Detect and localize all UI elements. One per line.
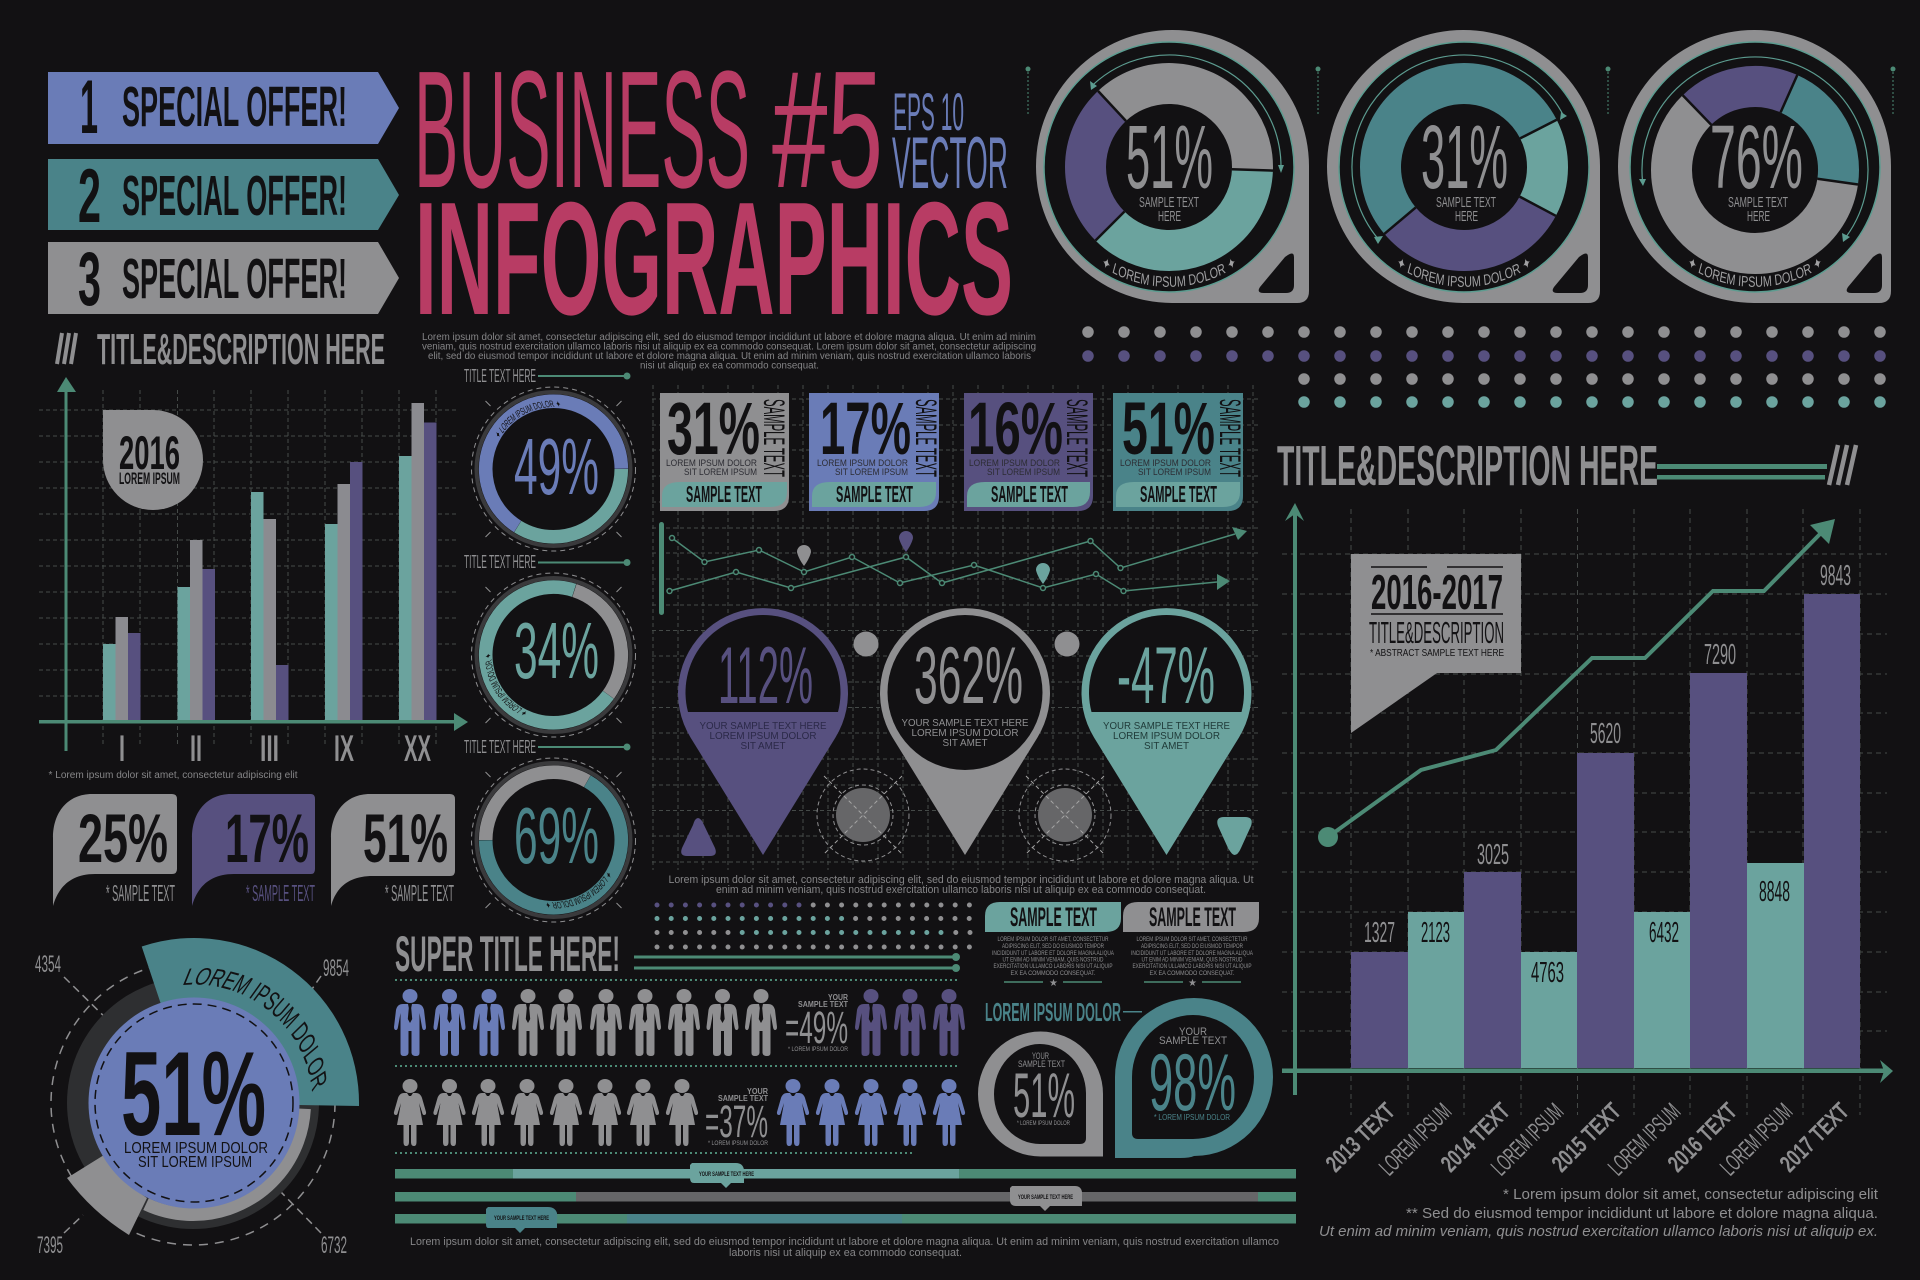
- sample text card 1: ADIPISCING ELIT, SED DO EIUSMOD TEMPOR: [1002, 944, 1105, 950]
- line chart markers: [797, 531, 1050, 584]
- main chart axis labels: 2013 TEXT: [1321, 1098, 1401, 1178]
- big donut: SIT LOREM IPSUM: [138, 1154, 252, 1171]
- people stat 49%: SAMPLE TEXT: [798, 1000, 848, 1009]
- donut value labels: 4354: [35, 951, 61, 978]
- people stat 49%: * LOREM IPSUM DOLOR: [788, 1047, 849, 1053]
- progress bar 1: YOUR SAMPLE TEXT HERE: [699, 1172, 754, 1178]
- progress bar 3: [395, 1207, 1296, 1233]
- banner 1: [48, 65, 399, 150]
- title tag 1: TITLE TEXT HERE: [464, 366, 536, 386]
- bottom caption: laboris nisi ut aliquip ex ea commodo consequat.: [729, 1247, 962, 1259]
- ring 49%: ✦ LOREM IPSUM DOLOR ✦: [496, 400, 560, 437]
- sample text card 2: LOREM IPSUM DOLOR SIT AMET, CONSECTETUR: [1136, 937, 1248, 943]
- banner 1: 1: [80, 65, 98, 150]
- bar chart axes: [39, 377, 468, 751]
- stat card 31%: SIT LOREM IPSUM: [684, 467, 757, 478]
- gauge 76%: SAMPLE TEXT: [1728, 194, 1788, 211]
- title tag 3: TITLE TEXT HERE: [464, 737, 536, 757]
- ring 49%: [471, 386, 636, 552]
- pins caption: [668, 874, 1254, 896]
- stat card 16%: 16%: [968, 387, 1063, 470]
- stat card 51%: SIT LOREM IPSUM: [1138, 467, 1211, 478]
- pin 112%: YOUR SAMPLE TEXT HERE: [700, 720, 826, 732]
- main title: BUSINESS: [414, 37, 750, 223]
- chart footnotes: [1319, 1186, 1879, 1240]
- main chart values: [1364, 560, 1851, 989]
- stat card 51%: 51%: [1122, 387, 1215, 470]
- bar chart category labels: I: [119, 728, 125, 769]
- stat card 17%: SAMPLE TEXT: [909, 399, 942, 477]
- bottom caption: Lorem ipsum dolor sit amet, consectetur adipiscing elit, sed do eiusmod tempor incididunt ut labore et dolore magna aliqua. Ut enim ad minim veniam, quis nostrud exercitation ullamco: [410, 1236, 1279, 1248]
- main chart bars: [1351, 594, 1860, 1068]
- stat card 17%: SIT LOREM IPSUM: [835, 467, 908, 478]
- gauge 76%: 76%: [1710, 108, 1803, 208]
- pin 362%: YOUR SAMPLE TEXT HERE: [902, 717, 1028, 729]
- ring 34%: ✦ LOREM IPSUM DOLOR ✦: [486, 654, 526, 716]
- intro paragraph: elit, sed do eiusmod tempor incididunt ut labore et dolore magna aliqua. Ut enim ad minim veniam, quis nostrud exercitation ullamco laboris: [428, 351, 1031, 362]
- callout 25%: 25%: [78, 800, 168, 877]
- callout 17%: [192, 794, 315, 906]
- sample text card 2: EXERCITATION ULLAMCO LABORIS NISI UT ALIQUIP: [1132, 964, 1252, 970]
- pin 362%: [880, 608, 1050, 855]
- people stat 49%: [785, 993, 849, 1053]
- main title: [414, 37, 1013, 349]
- ring 49%: 49%: [514, 422, 599, 511]
- sample text card 2: ★: [1188, 978, 1197, 989]
- infographic canvas: INFOGRAPHICS: [415, 169, 1013, 349]
- pin 112%: 112%: [718, 631, 813, 721]
- sample text card 1: UT ENIM AD MINIM VENIAM, QUIS NOSTRUD: [1002, 958, 1104, 964]
- gauge 51%: 51%: [1126, 108, 1213, 208]
- bar chart category labels: III: [260, 728, 279, 769]
- gauge 76%: HERE: [1747, 208, 1770, 225]
- pin -47%: -47%: [1117, 631, 1215, 721]
- main chart axes: [1282, 503, 1893, 1095]
- callout 51%: 51%: [363, 800, 448, 877]
- small markers beside gauges: [1026, 66, 1896, 116]
- main chart values: 4763: [1531, 957, 1564, 989]
- ring 34%: 34%: [514, 606, 599, 695]
- main chart axis labels: LOREM IPSUM: [1603, 1098, 1686, 1181]
- callout 17%: 17%: [225, 800, 309, 877]
- people stat 37%: * LOREM IPSUM DOLOR: [708, 1141, 769, 1147]
- gauge 51%: ✦ LOREM IPSUM DOLOR ✦: [1103, 258, 1235, 287]
- 2016 teardrop badge: [103, 410, 203, 510]
- teal teardrop 98%: * LOREM IPSUM DOLOR: [1154, 1113, 1230, 1122]
- dotted dividers: [395, 980, 960, 1153]
- stat card 16%: SIT LOREM IPSUM: [987, 467, 1060, 478]
- gauge 31%: 31%: [1421, 108, 1508, 208]
- gauge 51%: [1036, 30, 1309, 303]
- ring 69%: [471, 758, 636, 922]
- stat card 31%: 31%: [667, 387, 760, 470]
- stat card 16%: SAMPLE TEXT: [991, 481, 1068, 507]
- bar chart bars: [103, 403, 436, 720]
- ring 34%: [471, 572, 636, 738]
- stat card 17%: SAMPLE TEXT: [836, 481, 913, 507]
- stat card 31%: SAMPLE TEXT: [686, 481, 762, 507]
- ring 69%: ✦ LOREM IPSUM DOLOR ✦: [546, 872, 611, 908]
- pin -47%: LOREM IPSUM DOLOR: [1113, 730, 1220, 742]
- banner 3: SPECIAL OFFER!: [122, 247, 347, 311]
- crosshair circle 1: [817, 769, 909, 861]
- sample text card 2: SAMPLE TEXT: [1149, 902, 1236, 932]
- callout 2016-2017: * ABSTRACT SAMPLE TEXT HERE: [1370, 648, 1504, 659]
- main title: #5: [772, 37, 883, 223]
- section heading left: [57, 325, 385, 374]
- small circles between pins: [854, 632, 1080, 656]
- callout 2016-2017: [1351, 554, 1521, 733]
- callout 25%: [53, 794, 177, 906]
- gray teardrop 51%: SAMPLE TEXT: [1018, 1059, 1065, 1069]
- small triangle down: [1217, 817, 1252, 855]
- donut value labels: [35, 951, 349, 1259]
- infographic canvas: * SAMPLE TEXT: [106, 880, 175, 906]
- main chart values: 2123: [1421, 917, 1450, 949]
- trend line arrow: [1318, 519, 1835, 847]
- pin 112%: [678, 608, 848, 855]
- super title rules: [634, 953, 960, 972]
- pins caption: enim ad minim veniam, quis nostrud exercitation ullamco laboris nisi ut aliquip ex ea commodo consequat.: [716, 884, 1206, 896]
- main chart axis labels: LOREM IPSUM: [1715, 1098, 1798, 1181]
- sample text card 2: ADIPISCING ELIT, SED DO EIUSMOD TEMPOR: [1141, 944, 1244, 950]
- gauge 51%: SAMPLE TEXT: [1139, 194, 1199, 211]
- gauge 76%: ✦ LOREM IPSUM DOLOR ✦: [1689, 258, 1821, 287]
- main chart grid: [1282, 509, 1887, 1115]
- sample text card 1: SAMPLE TEXT: [1010, 902, 1097, 932]
- banner 2: [48, 154, 399, 239]
- chart footnotes: ** Sed do eiusmod tempor incididunt ut labore et dolore magna aliqua.: [1406, 1205, 1878, 1222]
- pin 362%: LOREM IPSUM DOLOR: [912, 727, 1019, 739]
- main chart values: 6432: [1649, 917, 1679, 949]
- bottom caption: [410, 1236, 1279, 1259]
- infographic canvas: TITLE&DESCRIPTION: [1369, 615, 1504, 650]
- banner 2: SPECIAL OFFER!: [122, 164, 347, 228]
- teal teardrop 98%: SAMPLE TEXT: [1159, 1035, 1227, 1047]
- infographic canvas: 9854: [323, 955, 349, 982]
- people stat 37%: SAMPLE TEXT: [718, 1094, 768, 1103]
- sample text card 1: ★: [1049, 978, 1058, 989]
- main chart axis labels: 2016 TEXT: [1663, 1098, 1743, 1178]
- progress bar 3: YOUR SAMPLE TEXT HERE: [494, 1216, 549, 1222]
- gray teardrop 51%: 51%: [1013, 1061, 1075, 1131]
- sample text card 1: EXERCITATION ULLAMCO LABORIS NISI UT ALIQUIP: [994, 964, 1112, 970]
- large dot matrix: [1088, 332, 1881, 402]
- teal teardrop 98%: YOUR: [1179, 1026, 1207, 1038]
- central grid: [652, 385, 1258, 870]
- chart footnotes: * Lorem ipsum dolor sit amet, consectetur adipiscing elit: [1503, 1186, 1879, 1203]
- main chart axis labels: 2015 TEXT: [1547, 1098, 1627, 1178]
- gauge 76%: [1618, 30, 1891, 303]
- stat card 16%: SAMPLE TEXT: [1060, 399, 1093, 477]
- infographic canvas: * SAMPLE TEXT: [246, 880, 315, 906]
- main chart axis labels: 2014 TEXT: [1436, 1098, 1516, 1178]
- stat card 51%: SAMPLE TEXT: [1213, 399, 1246, 477]
- small dot rows: [657, 905, 971, 947]
- main chart axis labels: 2017 TEXT: [1775, 1098, 1855, 1178]
- people stat 49%: =49%: [785, 1002, 848, 1053]
- banner 3: [48, 237, 399, 322]
- bar chart category labels: XX: [404, 728, 431, 769]
- bar chart footnote: * Lorem ipsum dolor sit amet, consectetur adipiscing elit: [48, 770, 298, 781]
- big donut: LOREM IPSUM DOLOR: [183, 968, 326, 1092]
- 2016 teardrop badge: 2016: [119, 426, 180, 479]
- gauge 31%: ✦ LOREM IPSUM DOLOR ✦: [1398, 258, 1530, 287]
- bar chart category labels: IX: [334, 728, 354, 769]
- teal teardrop 98%: [1115, 998, 1273, 1158]
- people row men: [394, 989, 965, 1056]
- stat card 17%: 17%: [820, 387, 911, 470]
- callout 2016-2017: 2016-2017: [1371, 566, 1503, 620]
- sample text card 2: UT ENIM AD MINIM VENIAM, QUIS NOSTRUD: [1142, 958, 1243, 964]
- chart footnotes: Ut enim ad minim veniam, quis nostrud exercitation ullamco laboris nisi ut aliquip ex.: [1319, 1223, 1878, 1240]
- big donut: LOREM IPSUM DOLOR: [124, 1140, 268, 1157]
- main chart values: 1327: [1364, 917, 1395, 949]
- gray teardrop 51%: * LOREM IPSUM DOLOR: [1017, 1121, 1071, 1127]
- line chart: [659, 522, 1247, 615]
- stat card 51%: SAMPLE TEXT: [1140, 481, 1217, 507]
- bar chart category labels: [119, 728, 431, 769]
- people stat 37%: =37%: [705, 1096, 768, 1147]
- gauge 31%: HERE: [1455, 208, 1478, 225]
- infographic canvas: * SAMPLE TEXT: [385, 880, 454, 906]
- main chart values: 5620: [1590, 718, 1621, 750]
- small triangle up: [681, 818, 716, 856]
- sample text card 1: [985, 902, 1121, 989]
- pin 362%: 362%: [914, 631, 1023, 721]
- sample text card 1: INCIDIDUNT UT LABORE ET DOLORE MAGNA ALIQUA: [992, 951, 1114, 957]
- main chart axis labels: LOREM IPSUM: [1374, 1098, 1457, 1181]
- main chart values: 7290: [1704, 639, 1736, 671]
- main chart values: 3025: [1477, 839, 1509, 871]
- progress bar 2: [395, 1186, 1296, 1211]
- banner 1: SPECIAL OFFER!: [122, 75, 347, 139]
- main chart axis labels: LOREM IPSUM: [1486, 1098, 1569, 1181]
- gray teardrop 51%: YOUR: [1032, 1051, 1049, 1061]
- lorem ipsum dolor heading: LOREM IPSUM DOLOR: [985, 997, 1121, 1027]
- intro paragraph: veniam, quis nostrud exercitation ullamco laboris nisi ut aliquip ex ea commodo consequat. Lorem ipsum dolor sit amet, consectetur adipiscing: [422, 342, 1036, 352]
- sample text card 2: [1123, 902, 1259, 989]
- main chart axis labels: [1321, 1098, 1855, 1181]
- 2016 teardrop badge: LOREM IPSUM: [119, 469, 180, 488]
- gray teardrop 51%: [978, 1032, 1103, 1156]
- donut value labels: 7395: [37, 1232, 63, 1259]
- bar chart category labels: II: [190, 728, 202, 769]
- pin -47%: YOUR SAMPLE TEXT HERE: [1103, 720, 1230, 732]
- donut value labels: 6732: [321, 1232, 347, 1259]
- people row women: [394, 1079, 965, 1146]
- gauge 31%: SAMPLE TEXT: [1436, 194, 1496, 211]
- pin 112%: SIT AMET: [740, 740, 786, 752]
- pin 112%: LOREM IPSUM DOLOR: [710, 730, 817, 742]
- stat card 17%: LOREM IPSUM DOLOR: [817, 458, 908, 469]
- stat card 31%: [660, 387, 790, 511]
- sample text card 1: LOREM IPSUM DOLOR SIT AMET, CONSECTETUR: [998, 937, 1109, 943]
- pin 362%: SIT AMET: [942, 737, 988, 749]
- intro paragraph: [422, 332, 1036, 372]
- infographic canvas: TITLE&DESCRIPTION HERE: [97, 325, 385, 374]
- big donut: [50, 938, 359, 1246]
- pins caption: Lorem ipsum dolor sit amet, consectetur adipiscing elit, sed do eiusmod tempor incididunt ut labore et dolore magna aliqua. Ut: [668, 874, 1254, 886]
- eps vector label: [892, 83, 1008, 204]
- progress bar 1: [395, 1163, 1296, 1188]
- crosshair circle 2: [1019, 769, 1111, 861]
- stat card 31%: LOREM IPSUM DOLOR: [666, 458, 757, 469]
- stat card 51%: [1113, 387, 1246, 511]
- sample text card 2: INCIDIDUNT UT LABORE ET DOLORE MAGNA ALIQUA: [1131, 951, 1253, 957]
- pin -47%: SIT AMET: [1144, 740, 1190, 752]
- people stat 37%: YOUR: [747, 1087, 768, 1096]
- sample text card 1: EX EA COMMODO CONSEQUAT.: [1010, 971, 1096, 977]
- intro paragraph: Lorem ipsum dolor sit amet, consectetur adipiscing elit, sed do eiusmod tempor incididunt ut labore et dolore magna aliqua. Ut enim ad minim: [422, 332, 1036, 343]
- banner 3: 3: [78, 237, 101, 322]
- teal teardrop 98%: 98%: [1149, 1038, 1236, 1128]
- eps vector label: EPS 10: [893, 83, 964, 142]
- people stat 37%: [705, 1087, 769, 1147]
- stat card 16%: [964, 387, 1093, 511]
- callout 51%: [331, 794, 455, 906]
- stat card 17%: [809, 387, 942, 511]
- main chart values: 8848: [1759, 876, 1790, 908]
- banner 2: 2: [78, 154, 101, 239]
- infographic canvas: SUPER TITLE HERE!: [395, 926, 620, 982]
- sample text card 2: EX EA COMMODO CONSEQUAT.: [1150, 971, 1235, 977]
- gauge 31%: [1327, 30, 1600, 303]
- people stat 49%: YOUR: [828, 993, 848, 1002]
- stat card 16%: LOREM IPSUM DOLOR: [969, 458, 1060, 469]
- bar chart grid: [39, 390, 456, 745]
- infographic canvas: VECTOR: [892, 123, 1008, 204]
- progress bar 2: YOUR SAMPLE TEXT HERE: [1018, 1195, 1073, 1201]
- gauge 51%: HERE: [1158, 208, 1181, 225]
- pin -47%: [1082, 608, 1252, 855]
- stat card 51%: LOREM IPSUM DOLOR: [1120, 458, 1211, 469]
- infographic canvas: 9843: [1820, 560, 1851, 592]
- big donut: 51%: [121, 1027, 266, 1161]
- title tag 2: TITLE TEXT HERE: [464, 552, 536, 572]
- ring 69%: 69%: [514, 791, 599, 880]
- intro paragraph: nisi ut aliquip ex ea commodo consequat.: [640, 360, 819, 372]
- stat card 31%: SAMPLE TEXT: [757, 399, 790, 477]
